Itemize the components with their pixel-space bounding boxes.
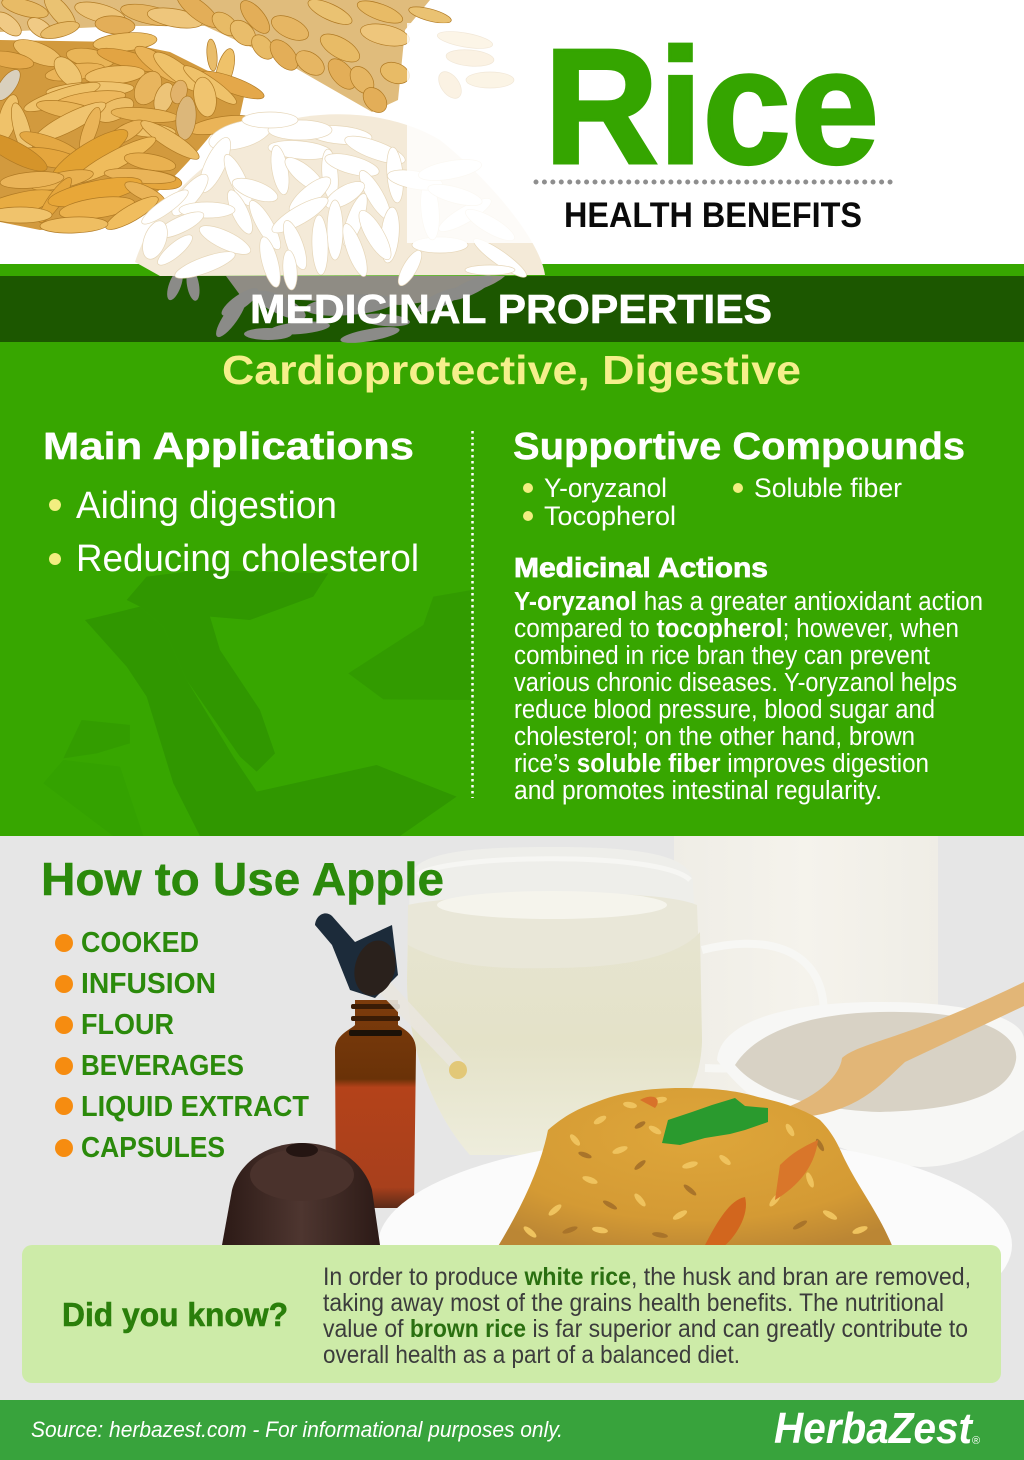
heading: how to use: How to Use Apple	[41, 853, 444, 905]
text block: medicinal actions: reduce blood pressure, blood sugar and	[514, 696, 935, 724]
item: flour: FLOUR	[81, 1009, 174, 1041]
logo: herbazest: ®	[972, 1435, 980, 1447]
compound: soluble fiber: Soluble fiber	[754, 473, 902, 503]
heading: supportive compounds: Supportive Compounds	[513, 426, 965, 468]
panel: supportive compounds	[513, 426, 965, 531]
item: infusion: INFUSION	[81, 968, 216, 1000]
callout text: overall health as a part of a balanced diet.	[323, 1341, 740, 1369]
subheading: properties list: Cardioprotective, Digestive	[222, 347, 801, 393]
photo: plate with rice	[378, 1088, 1012, 1353]
callout text	[323, 1263, 971, 1369]
bullet: aiding digestion: Aiding digestion	[76, 485, 337, 527]
background photo: arms silhouette	[43, 570, 472, 836]
photo: milk glass	[674, 836, 938, 1096]
text block: medicinal actions: compared to tocopherol; however, when	[514, 615, 959, 643]
lower section background	[0, 836, 1024, 1400]
text block: medicinal actions: and promotes intestinal regularity.	[514, 777, 882, 805]
footer background	[0, 1400, 1024, 1460]
item: cooked: COOKED	[81, 927, 199, 959]
photo: capsule	[222, 1143, 380, 1245]
callout background	[22, 1245, 1001, 1383]
photo: golden rice heap	[0, 30, 267, 235]
subtitle: health benefits: HEALTH BENEFITS	[564, 196, 862, 235]
callout text: taking away most of the grains health benefits. The nutritional	[323, 1289, 944, 1317]
item: beverages: BEVERAGES	[81, 1050, 244, 1082]
title: Rice: Rice	[544, 15, 879, 198]
heading bar	[0, 276, 1024, 342]
grain shadows over bar	[164, 268, 505, 346]
callout text: In order to produce white rice, the husk and bran are removed,	[323, 1263, 971, 1291]
text block: medicinal actions	[514, 588, 983, 805]
header background	[0, 0, 1024, 264]
item: capsules: CAPSULES	[81, 1132, 225, 1164]
text block: medicinal actions: various chronic diseases. Y-oryzanol helps	[514, 669, 957, 697]
heading: main applications: Main Applications	[43, 426, 414, 468]
vertical dotted divider	[471, 431, 474, 798]
heading: medicinal properties: MEDICINAL PROPERTIES	[250, 286, 772, 332]
source note: Source: herbazest.com - For informational purposes only.	[31, 1417, 563, 1442]
text block: medicinal actions: rice’s soluble fiber improves digestion	[514, 750, 929, 778]
list: uses	[55, 927, 309, 1164]
dotted divider	[536, 180, 890, 184]
photo: white rice heap	[135, 112, 545, 346]
text block: medicinal actions: Y-oryzanol has a greater antioxidant action	[514, 588, 983, 616]
text block: medicinal actions: combined in rice bran they can prevent	[514, 642, 930, 670]
callout heading: Did you know?	[62, 1296, 288, 1333]
item: liquid extract: LIQUID EXTRACT	[81, 1091, 309, 1123]
photo: glass mug of infusion	[407, 847, 823, 1155]
compound: tocopherol: Tocopherol	[544, 501, 676, 531]
logo: herbazest: HerbaZest	[774, 1404, 974, 1453]
photo: bowl of flour with spoon	[717, 982, 1024, 1167]
panel: main applications	[43, 426, 419, 580]
photo: dropper bottle	[315, 913, 467, 1208]
translucent white panel	[407, 23, 1024, 243]
heading: medicinal actions: Medicinal Actions	[514, 552, 768, 583]
compound: y-oryzanol: Y-oryzanol	[544, 473, 667, 503]
photo: rice panicle	[0, 0, 514, 117]
callout text: value of brown rice is far superior and can greatly contribute to	[323, 1315, 968, 1343]
bullet: reducing cholesterol: Reducing cholesterol	[76, 538, 419, 580]
callout: did you know	[22, 1245, 1001, 1383]
text block: medicinal actions: cholesterol; on the other hand, brown	[514, 723, 915, 751]
green panel background	[0, 264, 1024, 836]
